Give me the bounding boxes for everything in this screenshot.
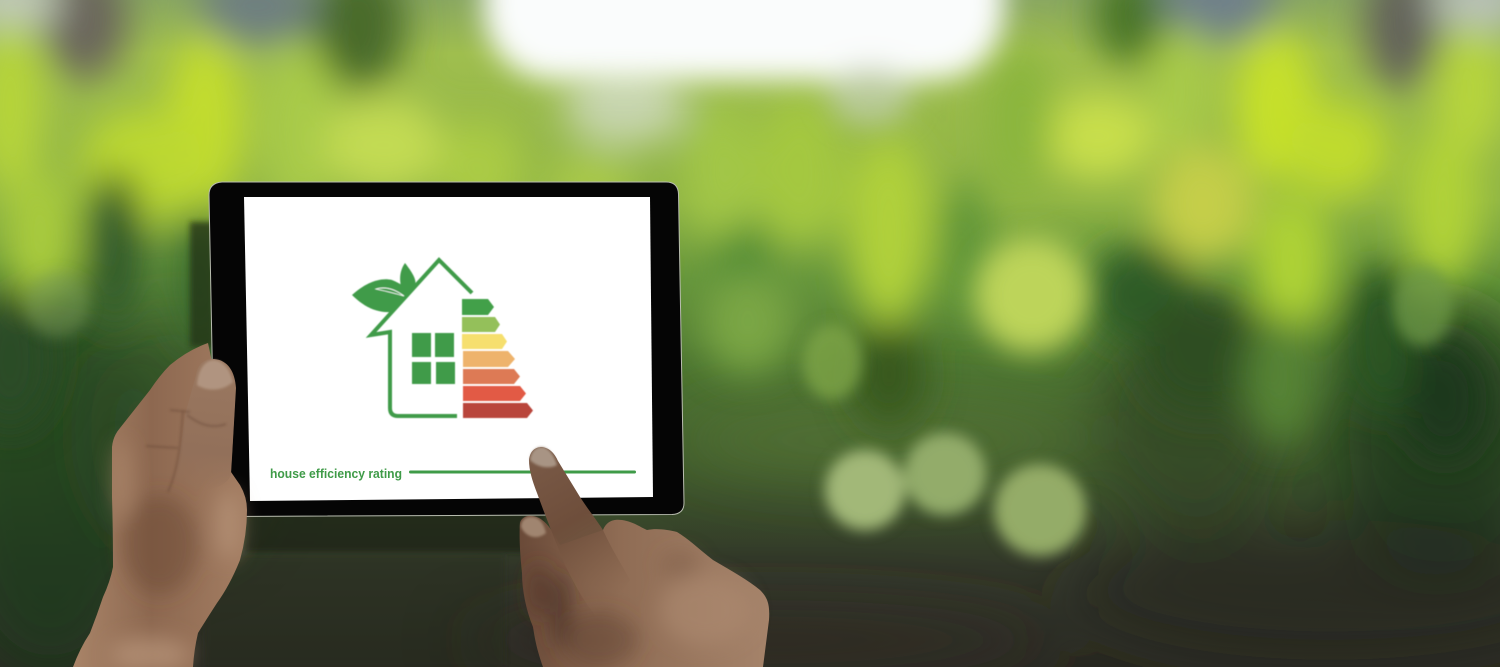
left hand (73, 343, 247, 667)
right hand (520, 447, 769, 667)
tablet screen (244, 197, 653, 501)
rear finger nail (521, 517, 546, 537)
caption rule (409, 470, 636, 474)
index finger (529, 447, 630, 620)
leaves (352, 263, 415, 312)
windows (412, 333, 455, 384)
sky cloud (484, 0, 1004, 80)
right hand shading (529, 551, 750, 667)
pale haze under the sky (563, 65, 687, 145)
index fingernail (530, 447, 557, 467)
bright lime bokeh (974, 237, 1090, 353)
house efficiency logo (352, 260, 533, 418)
mid-green lower blobs (702, 273, 794, 373)
top grey sky gaps (43, 0, 127, 80)
left hand shading (110, 440, 240, 667)
left thumb nail (197, 360, 233, 390)
tablet shadow (190, 222, 545, 667)
lime blades (0, 20, 44, 190)
left thumb (170, 359, 236, 495)
left hand creases (146, 410, 226, 492)
dark gaps between blades (85, 170, 145, 330)
energy rating bars (462, 299, 533, 418)
house outline (371, 260, 472, 416)
caption: house efficiency rating (270, 467, 402, 481)
tablet (209, 182, 684, 516)
